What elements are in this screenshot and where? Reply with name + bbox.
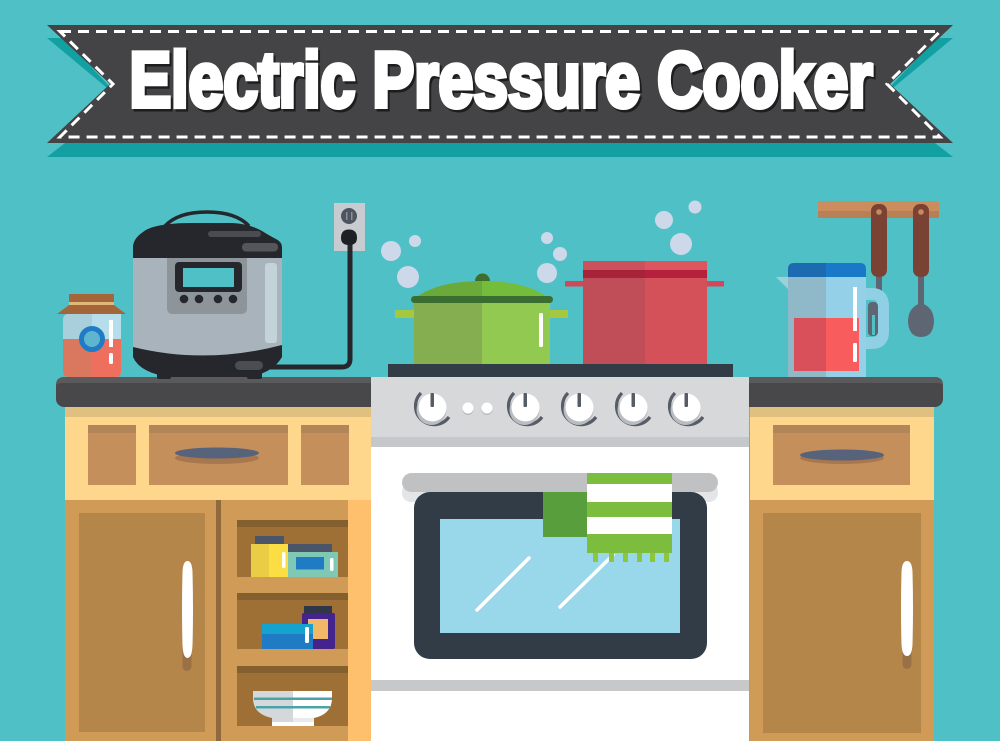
- wall outlet: [334, 203, 365, 251]
- hanging ladle: [871, 204, 887, 302]
- bowl: [253, 691, 332, 726]
- left cabinet: [65, 407, 371, 741]
- jar with lid: [57, 294, 126, 377]
- stove: [371, 364, 749, 741]
- purple jar: [302, 606, 335, 649]
- power cord and plug: [270, 230, 357, 367]
- left countertop: [56, 377, 386, 407]
- hanging spoon: [908, 204, 934, 337]
- title banner: [47, 25, 953, 157]
- knob 4: [617, 393, 650, 425]
- knob 5: [670, 393, 703, 425]
- cooker control panel: [167, 258, 247, 314]
- electric pressure cooker: [133, 212, 282, 379]
- steam bubbles: [381, 200, 702, 288]
- knob 3: [563, 393, 596, 425]
- utensil rack: [818, 201, 939, 337]
- drawer: [773, 425, 910, 485]
- green pot: [395, 274, 568, 364]
- oven window: [414, 492, 707, 659]
- blue box: [262, 624, 313, 649]
- oven door handle: [402, 473, 718, 502]
- door: [763, 513, 921, 733]
- red pot: [565, 261, 724, 364]
- teal box: [288, 544, 338, 577]
- drawer fronts: [88, 425, 349, 485]
- striped towel: [543, 473, 672, 562]
- measuring jug: [776, 263, 883, 377]
- cabinet door: [79, 500, 221, 741]
- right countertop: [735, 377, 943, 407]
- knob 1: [416, 393, 449, 425]
- knob 2: [509, 393, 542, 425]
- open shelves: [237, 520, 348, 726]
- control panel: [371, 377, 749, 447]
- yellow jar: [251, 536, 288, 577]
- indicator lights: [462, 402, 492, 415]
- right cabinet: [750, 407, 934, 741]
